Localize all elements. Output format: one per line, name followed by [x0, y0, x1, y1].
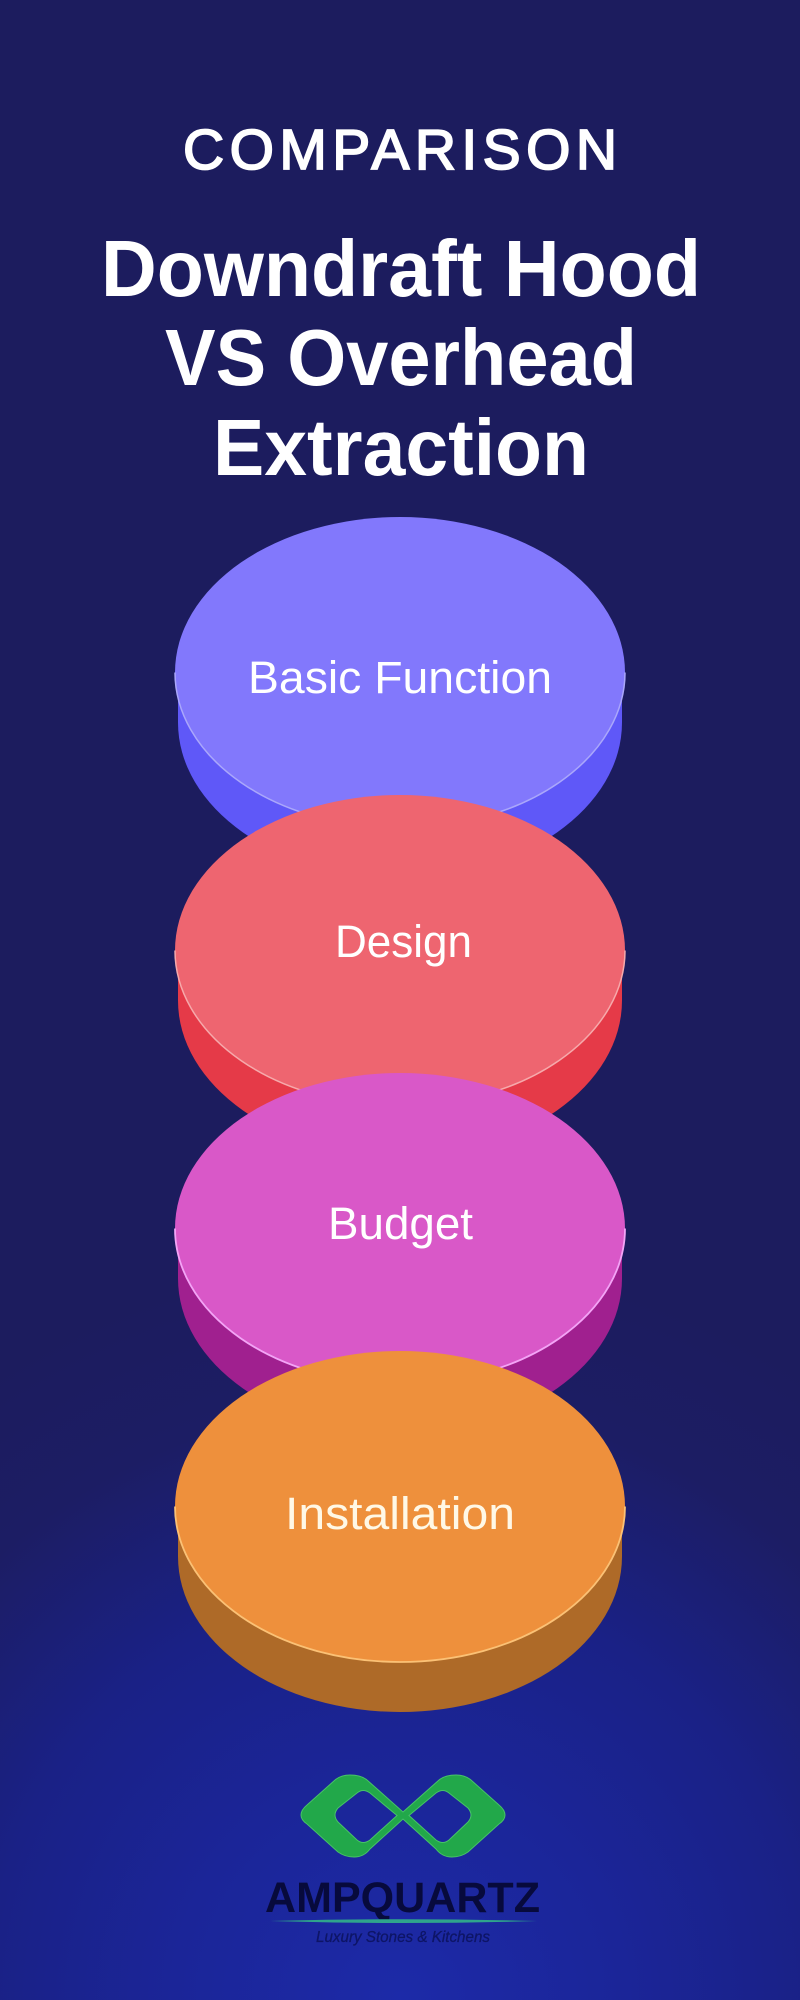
- logo wordmark: AMPQUARTZ: [265, 1874, 540, 1922]
- disc: Budget: Budget: [328, 1198, 474, 1249]
- disc: Basic Function: [175, 517, 625, 878]
- disc: Design: [175, 795, 625, 1156]
- disc: Basic Function: Basic Function: [248, 652, 552, 703]
- eyebrow heading: COMPARISON: COMPARISON: [183, 118, 617, 182]
- logo underline: [270, 1919, 537, 1923]
- disc: Budget: [175, 1073, 625, 1434]
- title: VS Overhead: [165, 313, 637, 402]
- logo tagline: Luxury Stones & Kitchens: [316, 1929, 490, 1946]
- title: [101, 224, 701, 492]
- logo: Ampquartz: [265, 1775, 540, 1946]
- disc: Installation: Installation: [285, 1488, 515, 1539]
- icon: green infinity mark: [301, 1775, 505, 1857]
- title: Extraction: [213, 403, 589, 492]
- disc: Installation: [175, 1351, 625, 1712]
- disc: Design: Design: [335, 916, 472, 967]
- title: Downdraft Hood: [101, 224, 701, 313]
